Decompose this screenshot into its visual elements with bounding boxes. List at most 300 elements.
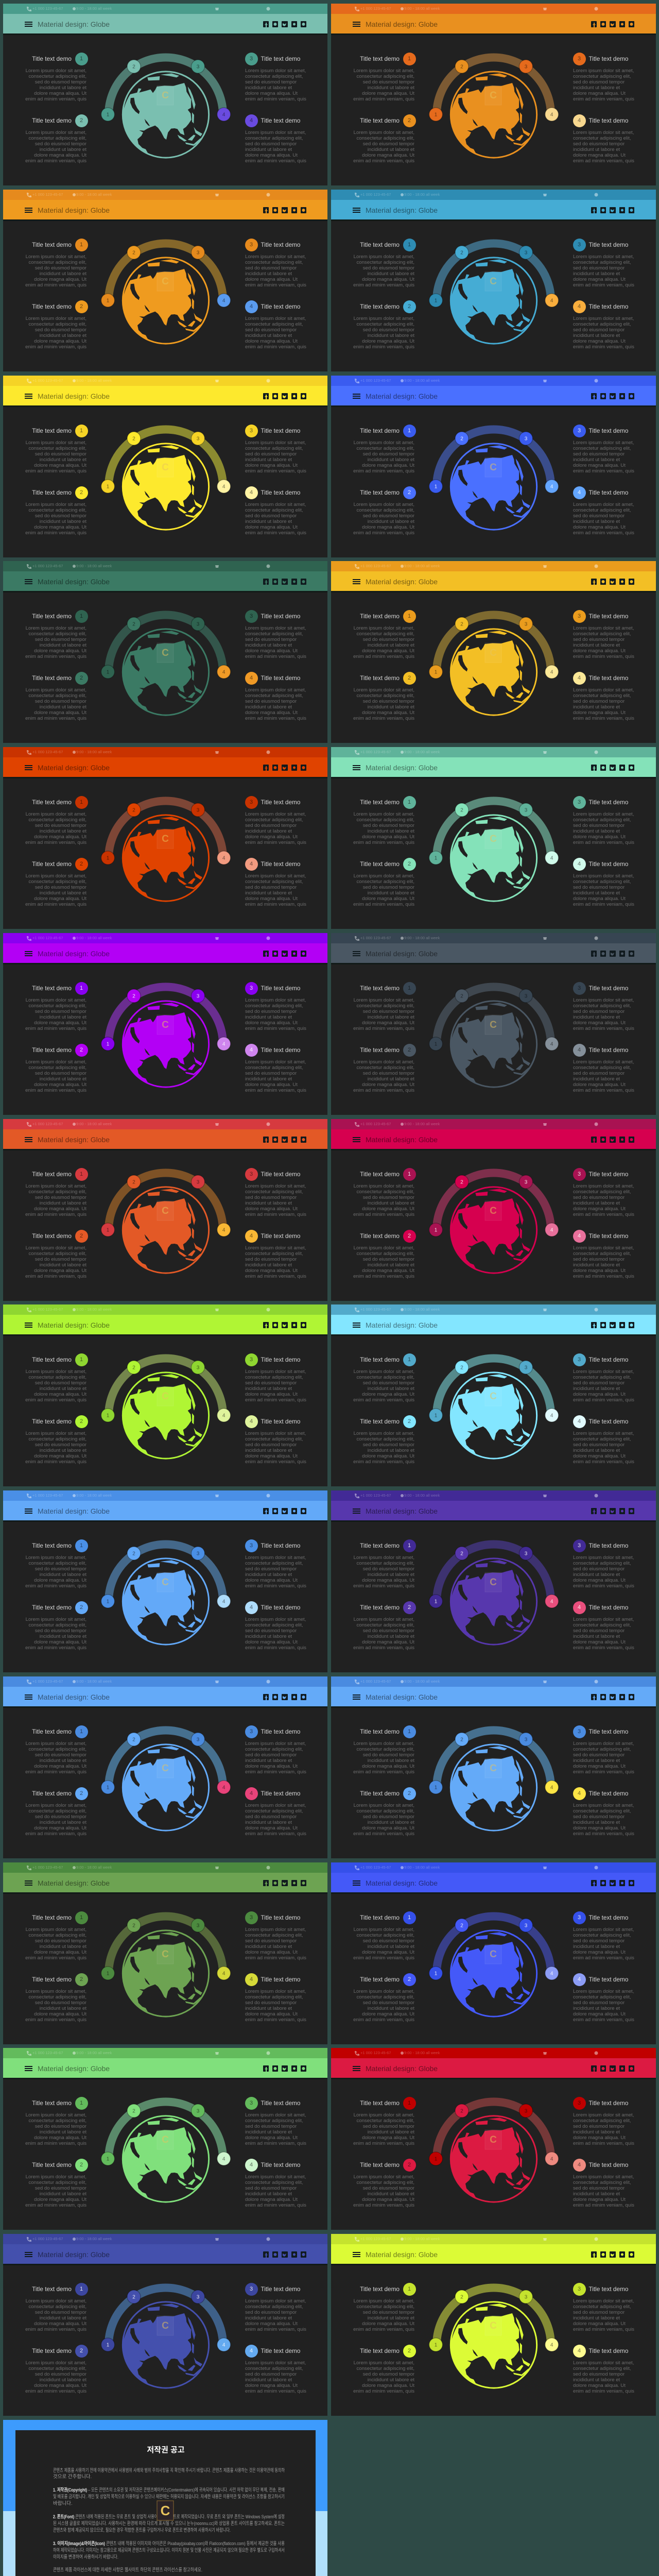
text block 4: consectetur adipiscing elit,	[573, 1065, 631, 1071]
globe and arc graphic: 1	[107, 2342, 110, 2348]
text block 2: enim ad minim veniam, quis	[353, 2388, 414, 2394]
text block 2: sed do eiusmod tempor	[363, 1442, 414, 1448]
text block 1: sed do eiusmod tempor	[363, 1009, 414, 1014]
text block 1: Title text demo	[32, 427, 72, 434]
text block 3: 3	[250, 56, 253, 62]
text block 2: enim ad minim veniam, quis	[25, 1459, 86, 1465]
text block 3	[573, 1911, 639, 1963]
contact strip: 9:00 - 18:00 all week	[76, 1307, 112, 1312]
text block 3	[245, 982, 312, 1033]
text block 2: sed do eiusmod tempor	[363, 1814, 414, 1820]
globe and arc graphic: 3	[197, 1923, 200, 1929]
contact strip	[331, 190, 656, 200]
text block 2: enim ad minim veniam, quis	[25, 1831, 86, 1837]
text block 4: sed do eiusmod tempor	[245, 2000, 297, 2006]
text block 1: sed do eiusmod tempor	[35, 2124, 86, 2129]
text block 4: Title text demo	[589, 860, 628, 868]
text block 4	[245, 672, 312, 723]
text block 4: 4	[250, 2162, 253, 2168]
text block 4: sed do eiusmod tempor	[245, 141, 297, 147]
text block 2	[3, 857, 86, 909]
globe and arc graphic: C	[162, 1020, 169, 1030]
text block 2: Title text demo	[32, 488, 72, 496]
text block 4: Title text demo	[589, 2347, 628, 2354]
contact strip: +1 000 123-45-67	[32, 1307, 63, 1312]
text block 3: dolore magna aliqua. Ut	[573, 463, 626, 468]
text block 1: enim ad minim veniam, quis	[353, 1955, 414, 1961]
text block 3: consectetur adipiscing elit,	[245, 1003, 303, 1009]
text block 2: Lorem ipsum dolor sit amet,	[354, 873, 414, 879]
text block 3: enim ad minim veniam, quis	[245, 2327, 306, 2332]
text block 4: 4	[250, 2347, 253, 2353]
text block 4: dolore magna aliqua. Ut	[573, 2197, 626, 2202]
text block 3: 3	[578, 985, 581, 991]
text block 2	[3, 1787, 86, 1838]
text block 4: dolore magna aliqua. Ut	[573, 710, 626, 716]
text block 2: Title text demo	[32, 1603, 72, 1611]
text block 3	[573, 2097, 639, 2148]
text block 1	[3, 1167, 86, 1219]
header bar	[331, 1687, 656, 1708]
globe and arc graphic: C	[162, 90, 169, 101]
copyright card	[15, 2430, 316, 2576]
contact strip	[3, 2048, 327, 2058]
panel: lime globe	[3, 1304, 327, 1486]
text block 3: enim ad minim veniam, quis	[245, 96, 306, 102]
text block 4: Lorem ipsum dolor sit amet,	[245, 2174, 306, 2179]
text block 1: sed do eiusmod tempor	[363, 1752, 414, 1758]
globe and arc graphic: 2	[460, 1180, 463, 1185]
text block 2: Title text demo	[360, 1046, 400, 1053]
globe and arc graphic: 4	[222, 2157, 226, 2162]
contact strip: 9:00 - 18:00 all week	[404, 378, 440, 383]
text block 2: Title text demo	[360, 1418, 400, 1425]
text block 4: consectetur adipiscing elit,	[245, 321, 303, 327]
text block 4: Title text demo	[589, 1232, 628, 1240]
text block 3: Lorem ipsum dolor sit amet,	[573, 625, 634, 631]
contact strip	[3, 190, 327, 200]
text block 4: enim ad minim veniam, quis	[245, 1459, 306, 1465]
text block 2: Title text demo	[32, 1046, 72, 1053]
text block 3: consectetur adipiscing elit,	[573, 1933, 631, 1938]
header bar	[3, 2244, 327, 2265]
text block 2: incididunt ut labore et	[40, 704, 86, 710]
text block 3: enim ad minim veniam, quis	[245, 1955, 306, 1961]
text block 3: incididunt ut labore et	[573, 1572, 620, 1578]
text block 1: incididunt ut labore et	[368, 457, 414, 463]
text block 1: 1	[80, 985, 83, 991]
text block 3: consectetur adipiscing elit,	[573, 1561, 631, 1566]
globe and arc graphic: 1	[107, 1599, 110, 1604]
text block 1: sed do eiusmod tempor	[35, 823, 86, 828]
text block 4: consectetur adipiscing elit,	[573, 1994, 631, 2000]
text block 4: Lorem ipsum dolor sit amet,	[573, 502, 634, 507]
text block 4: incididunt ut labore et	[245, 1634, 292, 1639]
panel: violet globe	[3, 933, 327, 1115]
text block 1: dolore magna aliqua. Ut	[34, 1392, 86, 1397]
text block 4: dolore magna aliqua. Ut	[245, 1082, 298, 1088]
text block 4: Title text demo	[261, 674, 300, 681]
text block 1	[353, 239, 416, 288]
text block 4	[245, 857, 312, 909]
text block 4: Title text demo	[589, 303, 628, 310]
globe and arc graphic: 4	[222, 112, 226, 117]
text block 1: incididunt ut labore et	[40, 1386, 86, 1392]
text block 3: incididunt ut labore et	[245, 1944, 292, 1950]
text block 2: incididunt ut labore et	[40, 147, 86, 152]
text block 2: incididunt ut labore et	[368, 890, 414, 896]
contact strip	[3, 2234, 327, 2244]
text block 4: Title text demo	[589, 674, 628, 681]
text block 3: sed do eiusmod tempor	[245, 637, 297, 642]
text block 1: sed do eiusmod tempor	[35, 1938, 86, 1944]
text block 2: enim ad minim veniam, quis	[25, 2017, 86, 2023]
text block 4: enim ad minim veniam, quis	[573, 1088, 634, 1093]
globe and arc graphic: 3	[197, 1737, 200, 1742]
header bar	[331, 943, 656, 964]
globe and arc graphic: 1	[435, 1599, 438, 1604]
text block 4: dolore magna aliqua. Ut	[573, 1825, 626, 1831]
contact strip	[3, 376, 327, 386]
text block 3: Title text demo	[261, 2099, 300, 2106]
text block 1: dolore magna aliqua. Ut	[362, 1950, 414, 1955]
text block 4: Title text demo	[589, 2161, 628, 2168]
text block 2: enim ad minim veniam, quis	[25, 530, 86, 536]
globe and arc graphic: C	[162, 1391, 169, 1402]
text block 2: Lorem ipsum dolor sit amet,	[26, 1430, 86, 1436]
contact strip: 9:00 - 18:00 all week	[404, 2050, 440, 2055]
text block 2: consectetur adipiscing elit,	[28, 1994, 86, 2000]
text block 3: enim ad minim veniam, quis	[245, 1026, 306, 1031]
globe and arc graphic: 2	[132, 1551, 135, 1557]
text block 2: consectetur adipiscing elit,	[28, 507, 86, 513]
text block 1: dolore magna aliqua. Ut	[34, 91, 86, 96]
text block 1: sed do eiusmod tempor	[363, 1566, 414, 1572]
text block 2: consectetur adipiscing elit,	[356, 2180, 414, 2185]
globe and arc graphic: 1	[435, 1785, 438, 1791]
text block 2: sed do eiusmod tempor	[363, 885, 414, 890]
globe and arc graphic: 2	[460, 250, 463, 256]
text block 4: Lorem ipsum dolor sit amet,	[245, 315, 306, 321]
panel: blue globe with pink accent	[3, 1676, 327, 1858]
contact strip: 9:00 - 18:00 all week	[76, 6, 112, 11]
text block 1: consectetur adipiscing elit,	[28, 1933, 86, 1938]
globe and arc graphic: 2	[132, 1923, 135, 1929]
text block 1: incididunt ut labore et	[40, 1944, 86, 1950]
text block 3	[573, 2282, 639, 2334]
text block 1: consectetur adipiscing elit,	[28, 260, 86, 265]
text block 4	[573, 1415, 639, 1466]
text block 4: Lorem ipsum dolor sit amet,	[573, 2174, 634, 2179]
text block 4: incididunt ut labore et	[245, 1076, 292, 1082]
text block 4: sed do eiusmod tempor	[573, 2371, 625, 2377]
contact strip: 9:00 - 18:00 all week	[404, 2236, 440, 2241]
text block 3: Lorem ipsum dolor sit amet,	[573, 1183, 634, 1189]
text block 4: dolore magna aliqua. Ut	[245, 1825, 298, 1831]
text block 2: enim ad minim veniam, quis	[25, 2388, 86, 2394]
globe and arc graphic: C	[162, 462, 169, 473]
text block 3: Lorem ipsum dolor sit amet,	[245, 1740, 306, 1747]
text block 4: Lorem ipsum dolor sit amet,	[245, 502, 306, 507]
text block 2: sed do eiusmod tempor	[35, 1071, 86, 1076]
text block 3: enim ad minim veniam, quis	[573, 1212, 634, 1217]
text block 2: Lorem ipsum dolor sit amet,	[354, 1989, 414, 1994]
text block 4: incididunt ut labore et	[245, 890, 292, 896]
text block 3: dolore magna aliqua. Ut	[245, 1206, 298, 1212]
text block 2: 2	[408, 2347, 411, 2353]
text block 4: Lorem ipsum dolor sit amet,	[573, 1430, 634, 1436]
text block 3: sed do eiusmod tempor	[573, 1380, 625, 1386]
text block 4: Lorem ipsum dolor sit amet,	[245, 1245, 306, 1251]
text block 3: Title text demo	[261, 1728, 300, 1735]
text block 2	[331, 1229, 414, 1281]
text block 4	[245, 1415, 312, 1466]
text block 3: Title text demo	[261, 427, 300, 434]
header bar	[3, 14, 327, 35]
text block 3: enim ad minim veniam, quis	[573, 282, 634, 288]
text block 2: consectetur adipiscing elit,	[356, 2366, 414, 2371]
globe and arc graphic	[429, 54, 559, 159]
globe and arc graphic: C	[162, 834, 169, 844]
text block 1	[331, 2097, 414, 2148]
text block 4: Title text demo	[261, 1790, 300, 1797]
text block 4: Lorem ipsum dolor sit amet,	[573, 130, 634, 135]
text block 3: dolore magna aliqua. Ut	[573, 277, 626, 282]
text block 1: sed do eiusmod tempor	[35, 637, 86, 642]
text block 2: 2	[80, 1418, 83, 1424]
text block 2: Lorem ipsum dolor sit amet,	[26, 502, 86, 507]
text block 1: Title text demo	[360, 1728, 400, 1735]
text block 2: sed do eiusmod tempor	[35, 513, 86, 519]
text block 1: Title text demo	[360, 2099, 400, 2106]
text block 1: incididunt ut labore et	[40, 1014, 86, 1020]
text block 1: consectetur adipiscing elit,	[356, 2118, 414, 2124]
contact strip: 9:00 - 18:00 all week	[76, 2236, 112, 2241]
panel: indigo blue globe	[331, 1862, 656, 2044]
text block 3: Lorem ipsum dolor sit amet,	[573, 997, 634, 1003]
copyright text: 콘텐츠와 함께 제공되지 않으므로, 필요한 경우 적합한 폰트를 구입하거나 무료 폰트로 변경하여 사용하시기 바랍니다.	[53, 2527, 231, 2533]
text block 4: Lorem ipsum dolor sit amet,	[245, 873, 306, 879]
text block 4: enim ad minim veniam, quis	[573, 1459, 634, 1465]
header bar: Material design: Globe	[38, 1693, 110, 1701]
text block 1	[3, 1539, 86, 1591]
text block 2: dolore magna aliqua. Ut	[34, 524, 86, 530]
text block 4: consectetur adipiscing elit,	[573, 1622, 631, 1628]
text block 4: dolore magna aliqua. Ut	[573, 1639, 626, 1645]
text block 1: Lorem ipsum dolor sit amet,	[354, 1368, 414, 1375]
text block 2: enim ad minim veniam, quis	[353, 158, 414, 164]
text block 2: 2	[408, 303, 411, 309]
text block 1: enim ad minim veniam, quis	[25, 1026, 86, 1031]
text block 3: incididunt ut labore et	[573, 828, 620, 834]
text block 1: dolore magna aliqua. Ut	[362, 2135, 414, 2141]
header bar: Material design: Globe	[366, 1136, 438, 1144]
text block 2: dolore magna aliqua. Ut	[362, 2011, 414, 2017]
text block 3: enim ad minim veniam, quis	[245, 840, 306, 845]
text block 3: enim ad minim veniam, quis	[573, 1955, 634, 1961]
contact strip: 9:00 - 18:00 all week	[76, 936, 112, 940]
text block 4: enim ad minim veniam, quis	[573, 2202, 634, 2208]
text block 3	[245, 1911, 312, 1963]
text block 2: 2	[408, 117, 411, 124]
text block 3: consectetur adipiscing elit,	[573, 446, 631, 451]
text block 2: Title text demo	[360, 1603, 400, 1611]
text block 4: sed do eiusmod tempor	[245, 885, 297, 890]
text block 3: 3	[578, 1356, 581, 1362]
text block 2: incididunt ut labore et	[368, 1076, 414, 1082]
text block 1: consectetur adipiscing elit,	[28, 74, 86, 79]
text block 2: consectetur adipiscing elit,	[356, 1436, 414, 1442]
text block 2: 2	[80, 1047, 83, 1053]
text block 1: dolore magna aliqua. Ut	[362, 463, 414, 468]
text block 1: Title text demo	[360, 1356, 400, 1363]
text block 1: Lorem ipsum dolor sit amet,	[26, 997, 86, 1003]
globe and arc graphic	[3, 561, 327, 743]
text block 3	[573, 239, 634, 288]
text block 4: Lorem ipsum dolor sit amet,	[573, 1059, 634, 1064]
text block 1: Lorem ipsum dolor sit amet,	[354, 2298, 414, 2304]
text block 4: enim ad minim veniam, quis	[245, 1645, 306, 1651]
text block 2: enim ad minim veniam, quis	[353, 1088, 414, 1093]
text block 3: sed do eiusmod tempor	[245, 2310, 297, 2315]
text block 1: Lorem ipsum dolor sit amet,	[354, 1555, 414, 1560]
text block 3: incididunt ut labore et	[245, 457, 292, 463]
text block 1: sed do eiusmod tempor	[35, 1566, 86, 1572]
text block 4: dolore magna aliqua. Ut	[245, 338, 298, 344]
text block 3	[573, 53, 634, 102]
text block 4: dolore magna aliqua. Ut	[573, 338, 626, 344]
contact strip: 9:00 - 18:00 all week	[76, 564, 112, 568]
header bar	[331, 571, 656, 592]
globe and arc graphic: 3	[525, 993, 528, 999]
text block 3	[573, 982, 639, 1033]
text block 2: incididunt ut labore et	[368, 1262, 414, 1268]
text block 1: Title text demo	[360, 1541, 400, 1549]
globe and arc graphic: C	[162, 1577, 169, 1588]
globe and arc graphic	[3, 2048, 327, 2230]
globe and arc graphic: C	[162, 1949, 169, 1960]
text block 3: dolore magna aliqua. Ut	[245, 1020, 298, 1026]
text block 4: 4	[578, 1604, 581, 1611]
text block 3: consectetur adipiscing elit,	[245, 446, 303, 451]
contact strip: +1 000 123-45-67	[360, 192, 391, 197]
globe and arc graphic	[331, 1862, 655, 2044]
text block 4: 4	[578, 1976, 581, 1982]
text block 2: consectetur adipiscing elit,	[356, 693, 414, 699]
text block 3: Lorem ipsum dolor sit amet,	[573, 2298, 634, 2304]
text block 4: dolore magna aliqua. Ut	[245, 152, 298, 158]
text block 1: 1	[408, 613, 411, 619]
text block 2: consectetur adipiscing elit,	[28, 879, 86, 885]
text block 2: consectetur adipiscing elit,	[356, 507, 414, 513]
text block 2: Lorem ipsum dolor sit amet,	[354, 130, 414, 135]
header bar: Material design: Globe	[366, 20, 438, 28]
panel: red orange globe	[3, 747, 327, 929]
globe and arc graphic: 1	[107, 855, 110, 861]
globe and arc graphic: 2	[460, 2108, 463, 2114]
text block 4: Title text demo	[261, 1046, 300, 1053]
contact strip: +1 000 123-45-67	[360, 1679, 391, 1684]
text block 3: Lorem ipsum dolor sit amet,	[245, 1927, 306, 1932]
text block 3: 3	[250, 1543, 253, 1549]
text block 1: 1	[408, 1171, 411, 1177]
text block 3: incididunt ut labore et	[245, 2129, 292, 2135]
text block 3: enim ad minim veniam, quis	[573, 1026, 634, 1031]
header bar: Material design: Globe	[38, 392, 110, 400]
text block 2: consectetur adipiscing elit,	[28, 1251, 86, 1257]
globe and arc graphic: 4	[222, 1599, 226, 1604]
globe and arc graphic	[331, 1304, 655, 1486]
panel: royal blue globe	[331, 376, 656, 557]
text block 3: dolore magna aliqua. Ut	[573, 1764, 626, 1769]
text block 2: 2	[408, 860, 411, 867]
text block 2: Title text demo	[32, 1790, 72, 1797]
text block 3: Title text demo	[589, 984, 628, 991]
contact strip	[3, 1676, 327, 1687]
text block 2: sed do eiusmod tempor	[35, 1814, 86, 1820]
text block 2	[3, 1415, 86, 1466]
globe and arc graphic	[3, 1490, 327, 1672]
text block 2	[25, 486, 88, 536]
text block 3: incididunt ut labore et	[573, 2315, 620, 2321]
text block 3: Title text demo	[589, 799, 628, 806]
text block 1: 1	[80, 1543, 83, 1549]
globe and arc graphic: 4	[550, 1599, 553, 1604]
text block 1: sed do eiusmod tempor	[363, 1195, 414, 1200]
text block 2: sed do eiusmod tempor	[35, 1628, 86, 1634]
globe and arc graphic: 2	[460, 64, 463, 70]
contact strip: 9:00 - 18:00 all week	[404, 936, 440, 940]
text block 2: consectetur adipiscing elit,	[28, 1065, 86, 1071]
text block 4: sed do eiusmod tempor	[573, 2185, 625, 2191]
text block 1: Lorem ipsum dolor sit amet,	[354, 440, 414, 445]
text block 3: dolore magna aliqua. Ut	[245, 1578, 298, 1583]
text block 2: 2	[408, 1232, 411, 1239]
text block 2: Title text demo	[32, 2347, 72, 2354]
text block 4: enim ad minim veniam, quis	[573, 1645, 634, 1651]
text block 2: consectetur adipiscing elit,	[28, 1436, 86, 1442]
text block 3: Title text demo	[261, 799, 300, 806]
copyright text: 것으로 간주합니다.	[53, 2474, 92, 2480]
globe and arc graphic: 4	[222, 670, 226, 675]
globe and arc graphic: 1	[435, 298, 438, 304]
text block 4: 4	[578, 2347, 581, 2353]
globe and arc graphic: 3	[525, 2295, 528, 2300]
text block 3: incididunt ut labore et	[573, 1944, 620, 1950]
text block 4: 4	[578, 1232, 581, 1239]
text block 1: sed do eiusmod tempor	[363, 823, 414, 828]
text block 4: enim ad minim veniam, quis	[245, 1088, 306, 1093]
text block 2: enim ad minim veniam, quis	[353, 1831, 414, 1837]
text block 4: enim ad minim veniam, quis	[245, 716, 306, 721]
header bar	[331, 386, 656, 407]
text block 2: Title text demo	[32, 2161, 72, 2168]
text block 1: Lorem ipsum dolor sit amet,	[354, 2112, 414, 2117]
text block 3: enim ad minim veniam, quis	[245, 1769, 306, 1775]
text block 1: incididunt ut labore et	[40, 271, 86, 277]
text block 1: Lorem ipsum dolor sit amet,	[354, 997, 414, 1003]
globe and arc graphic: 2	[132, 250, 135, 256]
text block 1: 1	[408, 241, 411, 247]
globe and arc graphic: 4	[550, 1227, 553, 1233]
text block 4: enim ad minim veniam, quis	[245, 2388, 306, 2394]
text block 1: dolore magna aliqua. Ut	[362, 834, 414, 840]
globe and arc graphic: 2	[460, 1923, 463, 1929]
text block 2: dolore magna aliqua. Ut	[362, 896, 414, 902]
text block 1: consectetur adipiscing elit,	[356, 260, 414, 265]
globe and arc graphic: 3	[525, 2108, 528, 2114]
text block 3: 3	[578, 428, 581, 434]
